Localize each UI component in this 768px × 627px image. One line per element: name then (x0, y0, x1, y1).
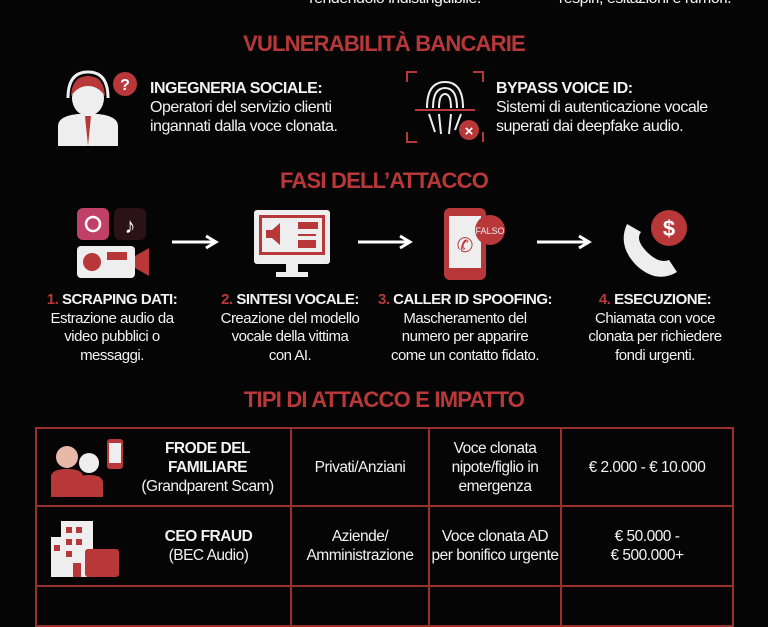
arrow 1 (172, 234, 219, 250)
text: bypass voice id: BYPASS VOICE ID: (496, 80, 633, 97)
step 1: video pubblici o (64, 328, 160, 345)
text: ingegneria sociale (150, 80, 337, 135)
icon: phone money: $ (663, 216, 675, 241)
step 3: numero per apparire (402, 328, 528, 345)
table: (Grandparent Scam) (141, 478, 274, 494)
heading: tipi: TIPI DI ATTACCO E IMPATTO (244, 387, 524, 412)
text: ingegneria sociale: INGEGNERIA SOCIALE: (150, 80, 322, 97)
step 2: vocale della vittima (232, 328, 348, 345)
table: € 500.000+ (610, 547, 684, 564)
table: (BEC Audio) (169, 547, 248, 564)
table: € 2.000 - € 10.000 (589, 458, 705, 476)
table: Privati/Anziani (315, 458, 405, 476)
table: FRODE DEL (165, 440, 250, 456)
table: Voce clonata AD (442, 528, 548, 545)
step 4: clonata per richiedere (588, 328, 722, 345)
icon: phone money (624, 210, 687, 277)
step 3 (378, 291, 552, 364)
icon: operator: ? (120, 77, 130, 94)
text: bypass voice id: superati dai deepfake audio. (496, 118, 683, 135)
table: Amministrazione (306, 547, 414, 564)
step 2 (221, 291, 360, 364)
table: FAMILIARE (168, 458, 247, 476)
step 3: 3. CALLER ID SPOOFING: (378, 291, 552, 308)
step 4: 4. ESECUZIONE: (599, 291, 711, 308)
table (35, 427, 734, 627)
arrow 3 (537, 234, 592, 250)
table: nipote/figlio in (452, 458, 538, 476)
text: ingegneria sociale: Operatori del servizio clienti (150, 99, 332, 116)
step 4: fondi urgenti. (615, 346, 695, 364)
step 4: Chiamata con voce (595, 310, 715, 326)
step 1: messaggi. (80, 346, 144, 364)
text: bypass voice id: Sistemi di autenticazione vocale (496, 99, 708, 116)
heading: fasi: FASI DELL’ATTACCO (280, 168, 488, 193)
table: emergenza (458, 478, 532, 494)
step 4 (588, 291, 722, 364)
step 3: Mascheramento del (403, 310, 527, 326)
icon: social media (77, 208, 149, 278)
step 2: con AI. (269, 346, 311, 364)
step 3: come un contatto fidato. (391, 346, 539, 364)
heading: vulnerabilità: VULNERABILITÀ BANCARIE (243, 31, 525, 56)
icon: phone spoof: ✆ (457, 235, 473, 257)
icon: monitor (254, 210, 330, 277)
table: Voce clonata (454, 440, 536, 456)
step 2: Creazione del modello (221, 310, 359, 326)
icon: fingerprint: × (465, 123, 474, 140)
table: € 50.000 - (615, 528, 679, 545)
step 1: 1. SCRAPING DATI: (47, 291, 177, 308)
step 1: Estrazione audio da (50, 310, 174, 326)
icon: operator (58, 70, 137, 146)
icon: fingerprint (406, 71, 484, 143)
table: per bonifico urgente (431, 547, 558, 564)
text: bypass voice id (496, 80, 708, 135)
icon: social media: ♪ (124, 213, 136, 238)
arrow 2 (358, 234, 413, 250)
step 2: 2. SINTESI VOCALE: (221, 291, 359, 308)
table: CEO FRAUD (165, 528, 252, 545)
step 1 (47, 291, 177, 364)
icon: phone spoof: FALSO (475, 226, 505, 236)
text: ingegneria sociale: ingannati dalla voce clonata. (150, 118, 337, 135)
icon: phone spoof (444, 208, 505, 280)
table: Aziende/ (332, 528, 388, 545)
